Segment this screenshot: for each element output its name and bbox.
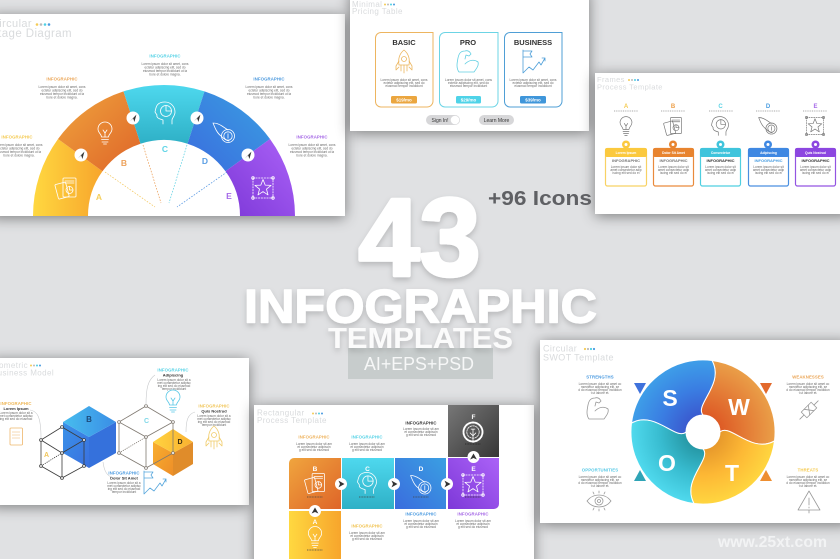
pricing card: pro: $29/mo — [461, 98, 477, 102]
caption block A: Lorem Ipsum — [3, 406, 29, 411]
caption B: bore et dolore magna. — [46, 96, 78, 100]
step A: Lorem ipsum dolor sit — [611, 165, 641, 169]
panel title: Pricing Table — [352, 7, 403, 16]
panel title — [0, 18, 72, 40]
caption C: Lorem ipsum dolor sit am — [349, 442, 385, 446]
panel title: Rectangular — [257, 408, 305, 418]
panel title: Frames — [597, 75, 625, 84]
caption block B: met consectetur adipisc — [107, 484, 141, 488]
caption opportunities: nsectetur adipiscing elit, se — [581, 478, 619, 482]
SWOT wheel — [631, 360, 775, 504]
caption B: ectetur adipiscing elit, sed do — [41, 88, 83, 92]
caption threats: THREATS — [798, 468, 818, 472]
panel title — [0, 361, 54, 378]
caption E: bore et dolore magna. — [296, 154, 328, 158]
button: sign in: Sign In! — [432, 118, 448, 124]
caption D: Lorem ipsum dolor sit amet, cons — [246, 85, 293, 89]
pricing card: business: ectetur adipiscing elit, sed do — [512, 81, 554, 85]
caption D: et consectetur adipiscin — [404, 522, 438, 526]
SWOT letters: W — [728, 394, 750, 420]
caption C: eiusmod tempor incididunt ut la — [143, 69, 187, 73]
semicircle segment B — [58, 91, 140, 171]
caption C: Lorem ipsum dolor sit amet, cons — [142, 62, 189, 66]
step B: Dolor Sit Amet — [662, 151, 686, 155]
panel: frames process template — [595, 73, 840, 214]
caption strengths — [578, 374, 622, 419]
button: sign in — [426, 115, 460, 125]
caption block B: tempor incididunt — [112, 490, 136, 494]
caption B: Lorem ipsum dolor sit am — [296, 442, 332, 446]
caption D: INFOGRAPHIC — [253, 76, 285, 82]
caption opportunities — [578, 468, 622, 511]
step C: Lorem ipsum dolor sit — [705, 165, 736, 169]
step A — [605, 104, 647, 186]
caption D: bore et dolore magna. — [253, 96, 285, 100]
cube B: B — [86, 415, 92, 424]
panel title: Minimal — [352, 0, 382, 9]
panel title: SWOT Template — [543, 352, 614, 362]
panel title: Process Template — [257, 416, 327, 425]
segment letters: D — [202, 156, 208, 166]
caption block D: met consectetur adipisc — [197, 417, 231, 421]
caption D: g elit sed do eiusmod — [406, 525, 436, 529]
caption E: INFOGRAPHIC — [296, 134, 328, 140]
caption opportunities: d do eiusmod tempor incididun — [578, 481, 622, 485]
caption A: et consectetur adipiscin — [350, 534, 384, 538]
tile B: B — [313, 466, 318, 473]
caption block C: met consectetur adipisc — [157, 381, 191, 385]
caption weaknesses: WEAKNESSES — [792, 374, 824, 380]
watermark: www.25xt.com — [717, 534, 827, 551]
segment letters: B — [121, 158, 127, 168]
wire cube A — [40, 426, 85, 479]
step D: Adipiscing — [760, 151, 777, 155]
cube B — [63, 406, 116, 468]
caption F: et consectetur adipiscin — [404, 430, 438, 434]
headline number 43: 43 — [358, 176, 480, 300]
pricing card: basic: ectetur adipiscing elit, sed do — [383, 81, 425, 85]
SWOT letters: O — [658, 450, 676, 476]
caption C: bore et dolore magna. — [149, 72, 181, 76]
caption threats: d do eiusmod tempor incididun — [786, 481, 830, 485]
caption E: eiusmod tempor incididunt ut la — [290, 150, 334, 154]
step C — [700, 104, 741, 186]
pricing card: basic: $19/mo — [396, 98, 412, 102]
pricing card: pro: ectetur adipiscing elit, sed do — [448, 81, 489, 85]
tile C: C — [365, 466, 370, 473]
semicircle segment A — [33, 139, 102, 216]
corner triangles — [634, 383, 772, 481]
pricing card: business: $39/mo — [525, 98, 541, 102]
panel title — [352, 0, 403, 16]
caption block A: INFOGRAPHIC — [0, 401, 32, 406]
caption block D: Lorem ipsum dolor sit a — [197, 414, 231, 418]
caption A — [0, 134, 43, 158]
caption block B: Lorem ipsum dolor sit a — [107, 481, 141, 485]
tile E: E — [471, 466, 476, 473]
caption B — [39, 76, 86, 100]
step C: amet consectetur adip — [705, 168, 736, 172]
caption block C: Lorem ipsum dolor sit a — [157, 378, 191, 382]
+96 icons label: +96 Icons — [488, 187, 592, 210]
step B — [653, 104, 694, 186]
panel: rectangular process template — [254, 405, 534, 559]
caption opportunities: Lorem ipsum dolor sit amet co — [579, 475, 622, 479]
caption D — [246, 76, 293, 100]
caption F — [403, 420, 439, 437]
tile D: D — [419, 466, 424, 473]
caption block B — [107, 470, 166, 494]
pricing card: basic: Lorem ipsum dolor sit amet, cons — [381, 78, 428, 82]
caption E: Lorem ipsum dolor sit amet, cons — [289, 143, 336, 147]
caption block C: INFOGRAPHIC — [157, 368, 189, 372]
caption weaknesses: nsectetur adipiscing elit, se — [789, 385, 827, 389]
S sector — [632, 360, 715, 434]
arrow connectors — [74, 112, 254, 162]
step D: Lorem ipsum dolor sit — [753, 165, 784, 169]
panel: circular stage diagram — [0, 14, 345, 216]
caption B: INFOGRAPHIC — [46, 76, 78, 82]
tile A — [289, 511, 341, 559]
caption weaknesses: t ut labore et. — [799, 391, 817, 395]
tile F — [448, 405, 499, 457]
panel: circular SWOT template — [540, 340, 840, 523]
caption A: INFOGRAPHIC — [351, 524, 383, 528]
caption block A — [0, 401, 33, 445]
caption E: ectetur adipiscing elit, sed do — [291, 146, 333, 150]
tile C — [342, 458, 394, 509]
caption C: g elit sed do eiusmod — [352, 448, 382, 452]
wire cube A: A — [44, 452, 49, 459]
pricing card: pro: Lorem ipsum dolor sit amet, cons — [445, 78, 492, 82]
step B: INFOGRAPHIC — [660, 158, 688, 163]
caption C — [142, 54, 189, 76]
pricing card: pro — [440, 32, 498, 107]
caption block D: ing elit sed do eiusmod — [198, 420, 231, 424]
W sector — [701, 360, 775, 444]
caption block C: ing elit sed do eiusmod — [158, 384, 191, 388]
caption B: Lorem ipsum dolor sit amet, cons — [39, 85, 86, 89]
caption block A: met consectetur adipisc — [0, 414, 33, 418]
arrows between tiles — [309, 451, 480, 517]
panel title — [257, 408, 327, 425]
caption block C: Adipiscing — [163, 372, 184, 378]
step E: E — [813, 104, 818, 110]
pricing card: pro: eiusmod tempor incididunt — [450, 84, 487, 88]
caption strengths: d do eiusmod tempor incididun — [578, 388, 622, 392]
tile D — [395, 458, 446, 509]
caption weaknesses — [786, 374, 830, 422]
caption A: g elit sed do eiusmod — [352, 537, 382, 541]
segment letters: E — [226, 191, 232, 201]
caption D: eiusmod tempor incididunt ut la — [247, 92, 291, 96]
step B: Lorem ipsum dolor sit — [658, 165, 689, 169]
SWOT letters: S — [662, 385, 678, 411]
T sector — [691, 430, 774, 504]
wire cube C: C — [144, 418, 149, 425]
segment letters: C — [162, 144, 168, 154]
step D — [748, 104, 789, 186]
caption threats — [786, 468, 830, 513]
caption A: INFOGRAPHIC — [1, 134, 33, 140]
caption F: g elit sed do eiusmod — [406, 433, 436, 437]
caption block B: INFOGRAPHIC — [108, 470, 140, 476]
panel title: Circular — [543, 344, 577, 354]
panel title — [543, 344, 614, 362]
caption C: ectetur adipiscing elit, sed do — [144, 66, 186, 70]
step D: INFOGRAPHIC — [754, 158, 783, 163]
panel: minimal pricing table — [350, 0, 589, 131]
caption B: et consectetur adipiscin — [297, 445, 331, 449]
AI+EPS+PSD badge — [348, 348, 493, 379]
step E: INFOGRAPHIC — [802, 158, 830, 163]
caption E — [455, 512, 491, 529]
step E: Lorem ipsum dolor sit — [800, 165, 831, 169]
caption C: INFOGRAPHIC — [149, 54, 181, 58]
wire cube C — [118, 405, 174, 469]
panel title — [597, 75, 663, 92]
caption strengths: STRENGTHS — [586, 374, 614, 380]
step C: iscing elit sed do ei — [707, 171, 734, 175]
step B: amet consectetur adip — [658, 168, 689, 172]
pricing card: pro: PRO — [460, 38, 476, 47]
caption A: bore et dolore magna. — [3, 154, 35, 158]
step E: amet consectetur adip — [800, 168, 831, 172]
caption block D — [197, 404, 231, 449]
caption block B: ing elit sed do eiusmod — [108, 487, 141, 491]
semicircle segment D — [188, 91, 270, 171]
step A: Lorem Ipsum — [616, 151, 636, 155]
caption weaknesses: Lorem ipsum dolor sit amet co — [787, 382, 830, 386]
segment icons — [55, 102, 274, 199]
caption A: Lorem ipsum dolor sit am — [349, 531, 385, 535]
caption block A: Lorem ipsum dolor sit a — [0, 411, 33, 415]
caption B: g elit sed do eiusmod — [299, 448, 329, 452]
tile F: F — [472, 414, 476, 421]
caption F: INFOGRAPHIC — [405, 420, 437, 426]
INFOGRAPHIC heading: INFOGRAPHIC — [244, 280, 597, 332]
pricing card: business: eiusmod tempor incididunt — [514, 84, 552, 88]
caption D: INFOGRAPHIC — [405, 512, 437, 516]
caption threats: Lorem ipsum dolor sit amet co — [787, 475, 830, 479]
caption D: Lorem ipsum dolor sit am — [403, 519, 439, 523]
caption C: INFOGRAPHIC — [351, 434, 383, 440]
AI+EPS+PSD badge: AI+EPS+PSD — [364, 353, 474, 374]
step C: C — [718, 104, 723, 110]
step A: iscing elit sed do ei — [613, 171, 640, 175]
step D: amet consectetur adip — [753, 168, 784, 172]
step E: iscing elit sed do ei — [802, 171, 829, 175]
caption block D: INFOGRAPHIC — [198, 404, 230, 408]
panel title: Process Template — [597, 82, 663, 92]
caption block D: tempor incididunt — [202, 423, 226, 427]
cube D: D — [177, 439, 183, 446]
segment letters: A — [96, 192, 102, 202]
caption C: et consectetur adipiscin — [350, 445, 384, 449]
step C: INFOGRAPHIC — [706, 158, 735, 163]
button: learn more: Learn More — [484, 118, 509, 124]
caption threats: t ut labore et. — [799, 484, 817, 488]
inner dashed spokes — [105, 145, 227, 207]
caption C — [349, 434, 385, 452]
caption block B: Dolor Sit Amet — [110, 476, 138, 480]
caption weaknesses: d do eiusmod tempor incididun — [786, 388, 830, 392]
caption E — [289, 134, 336, 158]
caption F: Lorem ipsum dolor sit am — [403, 427, 439, 431]
pricing card: basic — [376, 32, 433, 107]
semicircle segment E — [226, 139, 295, 216]
pricing card: business — [504, 32, 562, 107]
caption strengths: Lorem ipsum dolor sit amet co — [579, 382, 622, 386]
tile A: A — [313, 519, 318, 526]
step D: D — [766, 104, 771, 110]
step B: iscing elit sed do ei — [660, 171, 687, 175]
caption strengths: t ut labore et. — [591, 391, 609, 395]
caption E: g elit sed do eiusmod — [458, 525, 488, 529]
caption block C — [157, 368, 191, 412]
tile E — [448, 458, 499, 509]
pricing card: business: Lorem ipsum dolor sit amet, cons — [510, 78, 557, 82]
SWOT letters: T — [725, 460, 739, 486]
step E — [795, 104, 836, 186]
caption opportunities: t ut labore et. — [591, 484, 609, 488]
segment letters — [96, 144, 232, 202]
step A: amet consectetur adip — [610, 168, 642, 172]
semicircle segment C — [124, 85, 204, 144]
caption D: ectetur adipiscing elit, sed do — [248, 88, 290, 92]
pricing card: basic: eiusmod tempor incididunt — [385, 84, 423, 88]
tile B — [289, 458, 341, 509]
step A: INFOGRAPHIC — [612, 158, 640, 163]
caption threats: nsectetur adipiscing elit, se — [789, 478, 827, 482]
O sector — [631, 420, 705, 504]
TEMPLATES subheading: TEMPLATES — [328, 323, 513, 355]
pricing card: basic: BASIC — [392, 38, 416, 47]
caption B: eiusmod tempor incididunt ut la — [40, 92, 84, 96]
caption block A: ing elit sed do eiusmod — [0, 417, 33, 421]
button: learn more — [479, 115, 514, 125]
cube D — [153, 429, 193, 476]
step A: A — [624, 104, 629, 110]
caption strengths: nsectetur adipiscing elit, se — [581, 385, 619, 389]
caption B: INFOGRAPHIC — [298, 434, 330, 440]
caption E: et consectetur adipiscin — [456, 522, 490, 526]
step C: Consectetur — [711, 151, 731, 155]
caption E: Lorem ipsum dolor sit am — [455, 519, 491, 523]
step B: B — [671, 104, 676, 110]
step D: iscing elit sed do ei — [755, 171, 782, 175]
caption D — [403, 512, 439, 529]
panel: isometric business model — [0, 358, 249, 505]
caption E: INFOGRAPHIC — [457, 512, 489, 516]
pricing card: business: BUSINESS — [514, 38, 552, 47]
caption A — [349, 524, 385, 541]
leader lines — [30, 375, 195, 477]
caption block D: Quis Nostrud — [201, 408, 227, 414]
SWOT letters — [658, 385, 750, 486]
caption B — [296, 434, 332, 452]
step E: Quis Nostrud — [805, 151, 826, 155]
caption opportunities: OPPORTUNITIES — [582, 468, 618, 472]
caption block C: tempor incididunt — [162, 387, 186, 391]
